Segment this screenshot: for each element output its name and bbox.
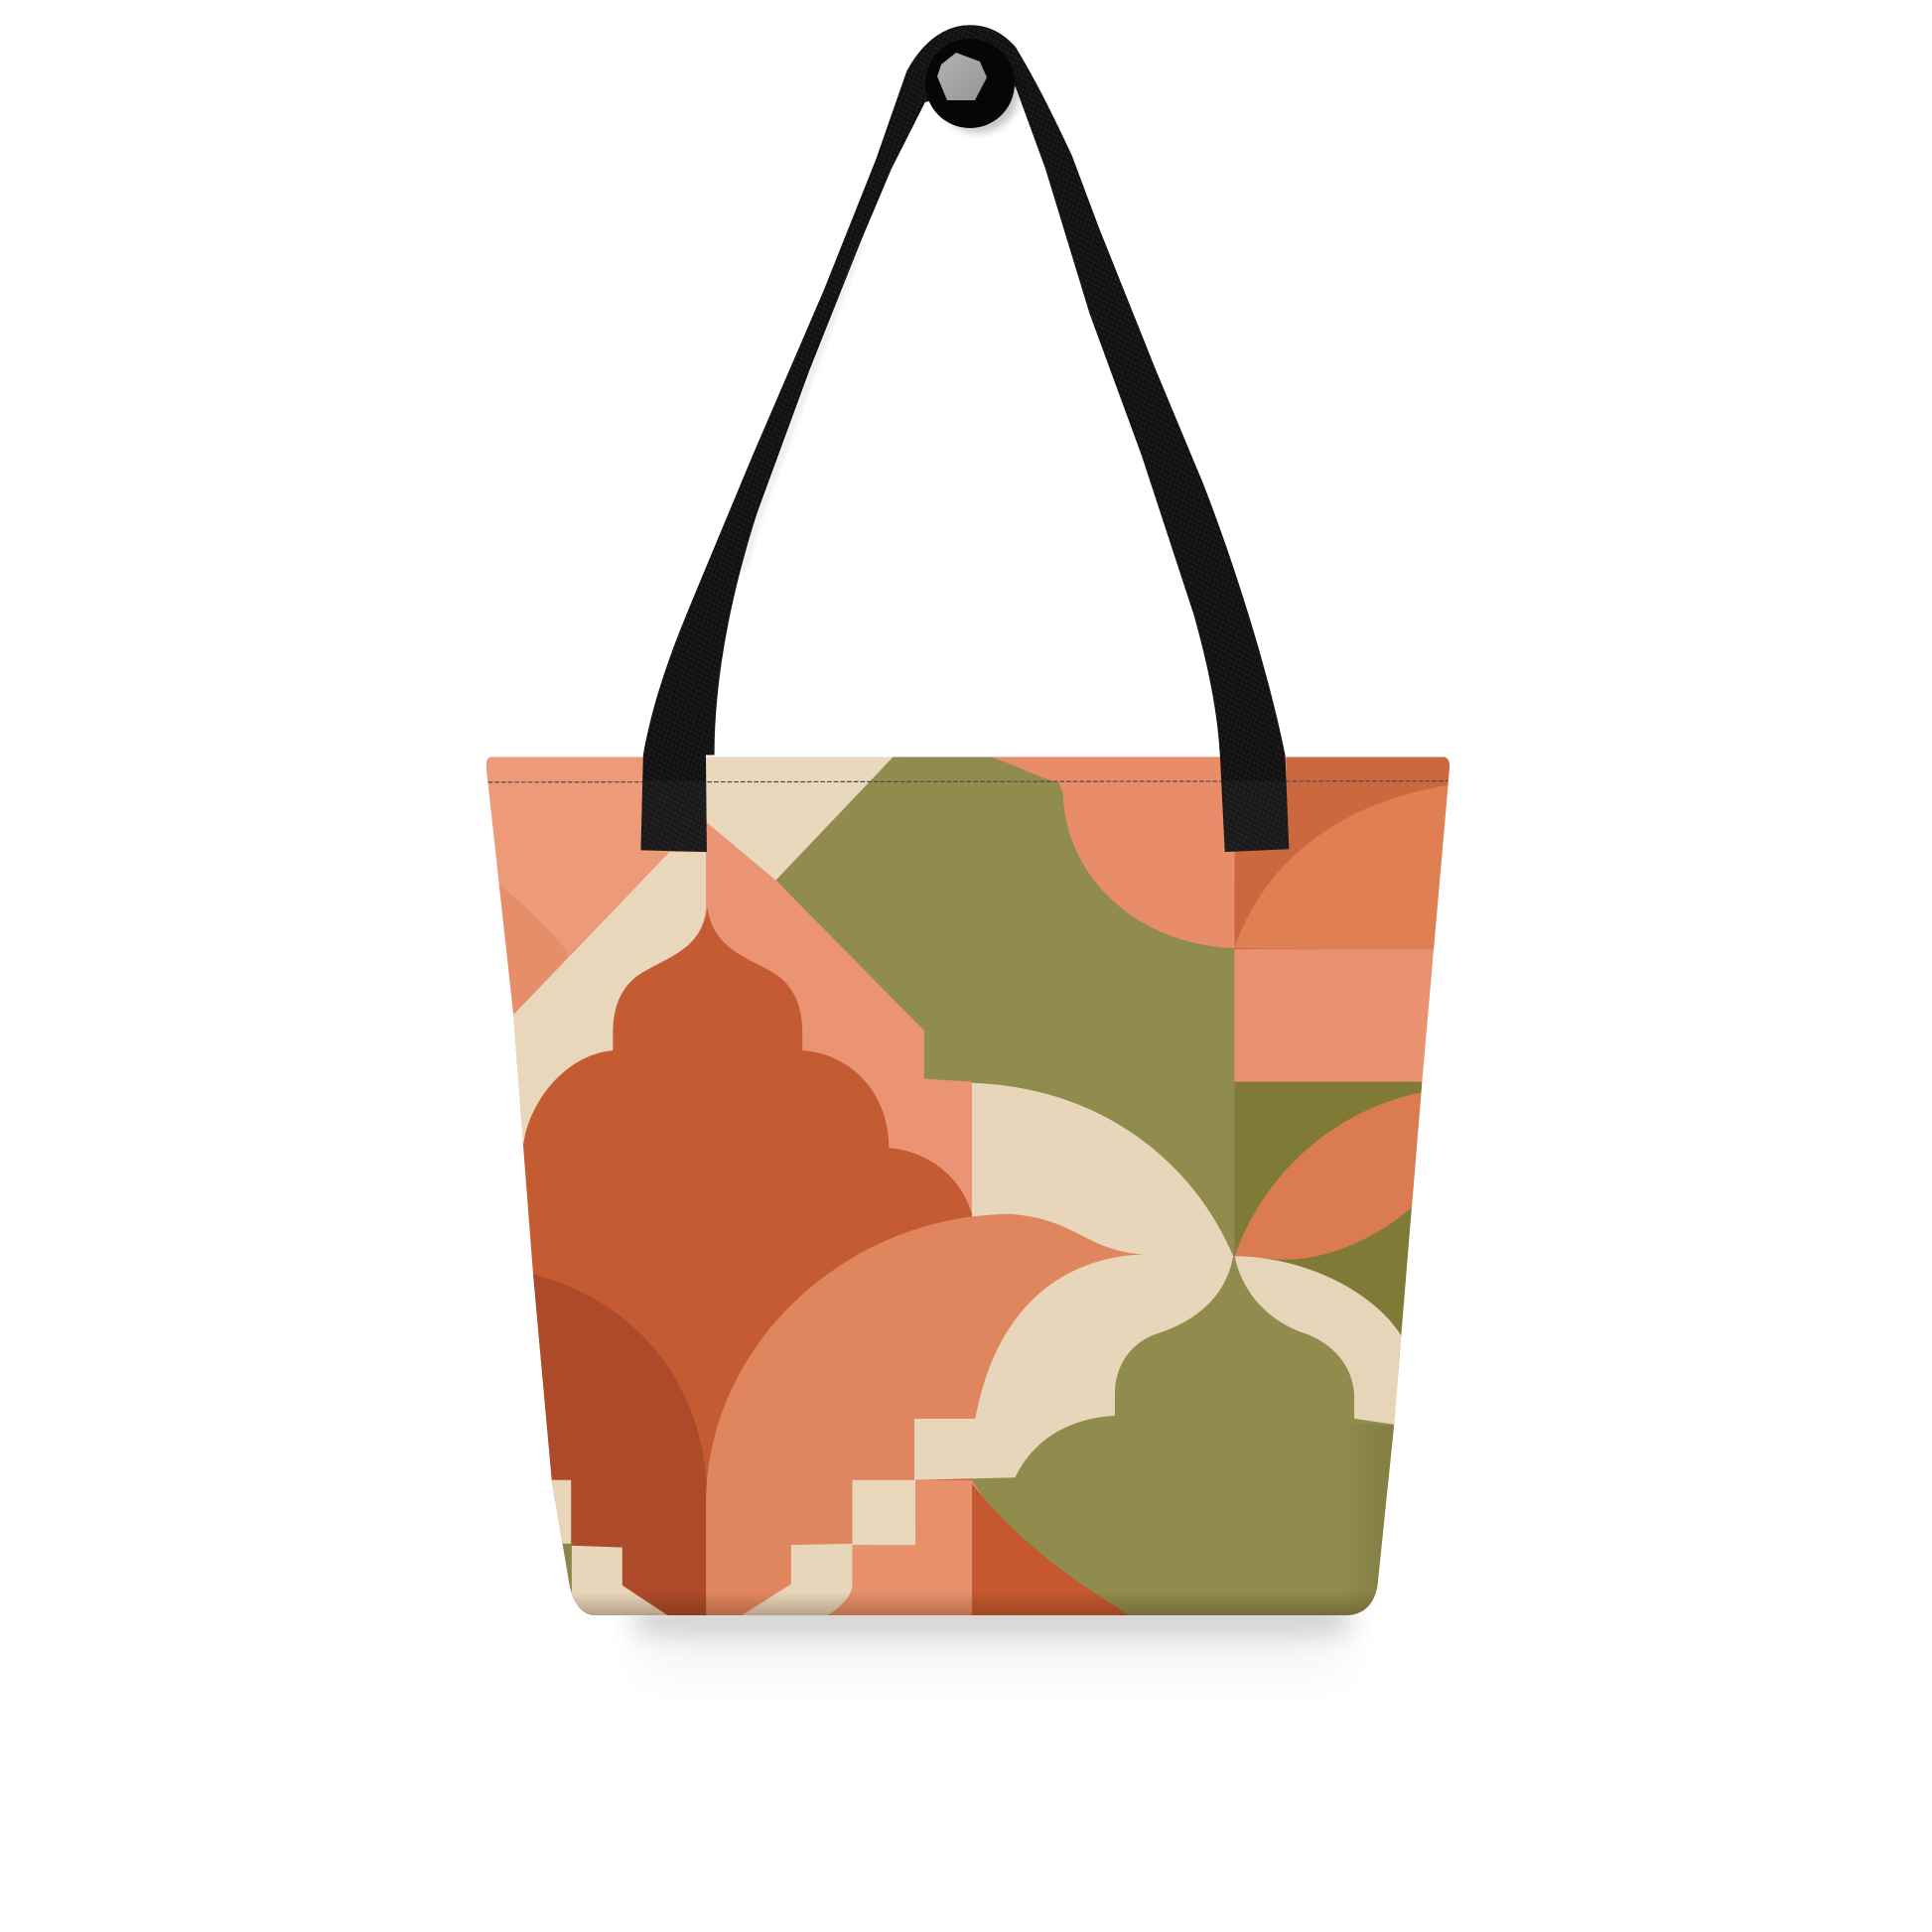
strap shadow [743, 239, 862, 570]
panel: top-right orange [1234, 751, 1457, 949]
icon: right salmon leaf [1234, 1091, 1431, 1260]
panel: dark olive block [1235, 1082, 1422, 1376]
panel: right salmon block [1234, 949, 1448, 1082]
panel: central cream arch [914, 1083, 1233, 1480]
hem stitching [488, 781, 1448, 782]
wall peg [925, 39, 1020, 133]
panel: hem strip [1285, 757, 1287, 758]
icon: top-right leaf [1234, 784, 1457, 951]
panel: bottom cream ogee [743, 1543, 852, 1615]
panel: top-left darker salmon triangle [496, 882, 568, 1016]
panel: bottom red triangle [972, 1483, 1129, 1615]
shadow under bag [635, 1606, 1350, 1668]
peg body [925, 39, 1015, 128]
product illustration: tote bag on a peg [486, 25, 1449, 1656]
panel: large red ogee arch [486, 907, 972, 1623]
panel: salmon lotus [706, 1214, 1144, 1623]
panel: top-left light salmon [486, 757, 707, 957]
panel: salmon band around ogee [707, 822, 972, 1083]
right side shading [1368, 1425, 1394, 1600]
panel: upper salmon circle [991, 751, 1238, 948]
handles [640, 25, 1289, 852]
black strap [640, 25, 1289, 852]
panel: cream square [852, 1480, 915, 1545]
panel: dark rust arch [533, 1275, 707, 1615]
right strap stitched end [1223, 780, 1289, 852]
panel: bottom salmon steps [852, 1479, 972, 1554]
panel: lower-right cream arch [1234, 1256, 1404, 1426]
panel: lower olive field [972, 1257, 1394, 1615]
panel: bottom-left olive sliver [562, 1543, 572, 1593]
panel: top cream diamond [706, 757, 894, 882]
left strap stitched end [640, 780, 707, 852]
peg shadow [936, 50, 1020, 133]
panel: base salmon [486, 757, 1449, 1615]
tote bag body [486, 757, 1449, 1615]
panel: upper-left cream band [513, 852, 707, 1144]
bottom fold shading [573, 1595, 1373, 1615]
panel: bottom-left cream steps [552, 1479, 667, 1615]
panel: large olive field [775, 751, 1238, 1259]
peg hexagonal highlight [937, 53, 987, 100]
